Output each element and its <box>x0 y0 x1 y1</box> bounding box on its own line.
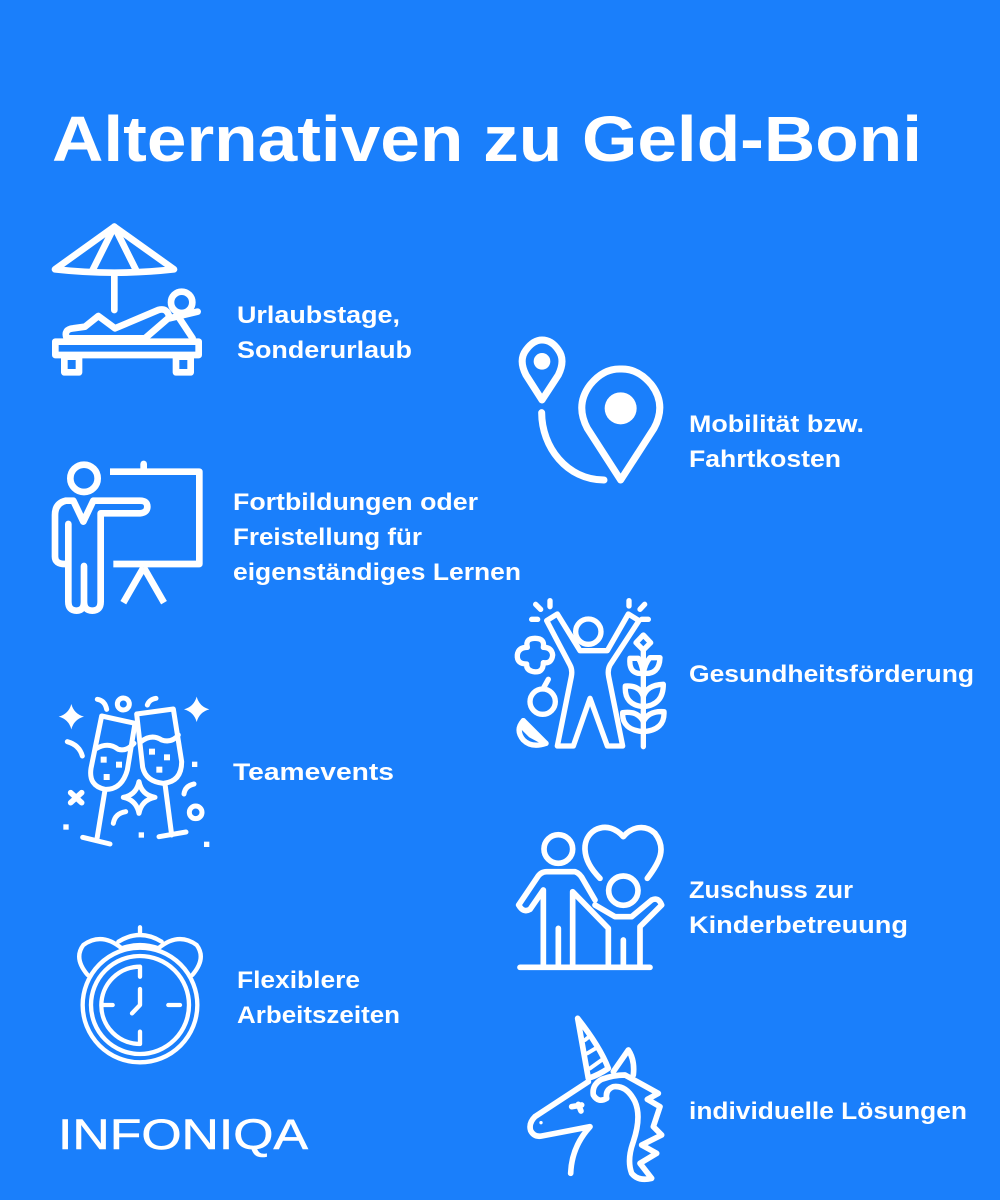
icon: champagne glasses <box>59 697 209 847</box>
icon: sun lounger with umbrella <box>55 227 199 372</box>
label: Flexiblere Arbeitszeiten: Flexiblere <box>237 967 360 994</box>
logo: INFONIQA <box>58 1111 308 1159</box>
icon: map pins <box>522 340 660 480</box>
icon: unicorn <box>530 1018 662 1179</box>
label: Urlaubstage: Sonderurlaub <box>237 337 412 364</box>
label: Fortbildungen: Fortbildungen oder <box>233 489 478 516</box>
label: Gesundheitsförderung: Gesundheitsförderung <box>689 661 974 688</box>
label: Fortbildungen: Freistellung für <box>233 524 422 551</box>
icon: presenter at board <box>55 464 199 611</box>
label: Mobilität: Mobilität bzw. <box>689 411 864 438</box>
title: Alternativen zu Geld-Boni <box>52 103 922 175</box>
label: Fortbildungen: eigenständiges Lernen <box>233 559 521 586</box>
label: Teamevents: Teamevents <box>233 759 394 786</box>
label: Flexiblere Arbeitszeiten: Arbeitszeiten <box>237 1002 400 1029</box>
label: Mobilität: Fahrtkosten <box>689 446 841 473</box>
label: Urlaubstage: Urlaubstage, <box>237 302 400 329</box>
label: Zuschuss: Zuschuss zur <box>689 877 853 904</box>
label: Zuschuss: Kinderbetreuung <box>689 912 908 939</box>
label: individuelle Lösungen: individuelle Lösungen <box>689 1098 967 1125</box>
icon: health person <box>517 601 664 747</box>
icon: alarm clock <box>79 927 201 1062</box>
icon: parent and child with heart <box>519 827 662 967</box>
